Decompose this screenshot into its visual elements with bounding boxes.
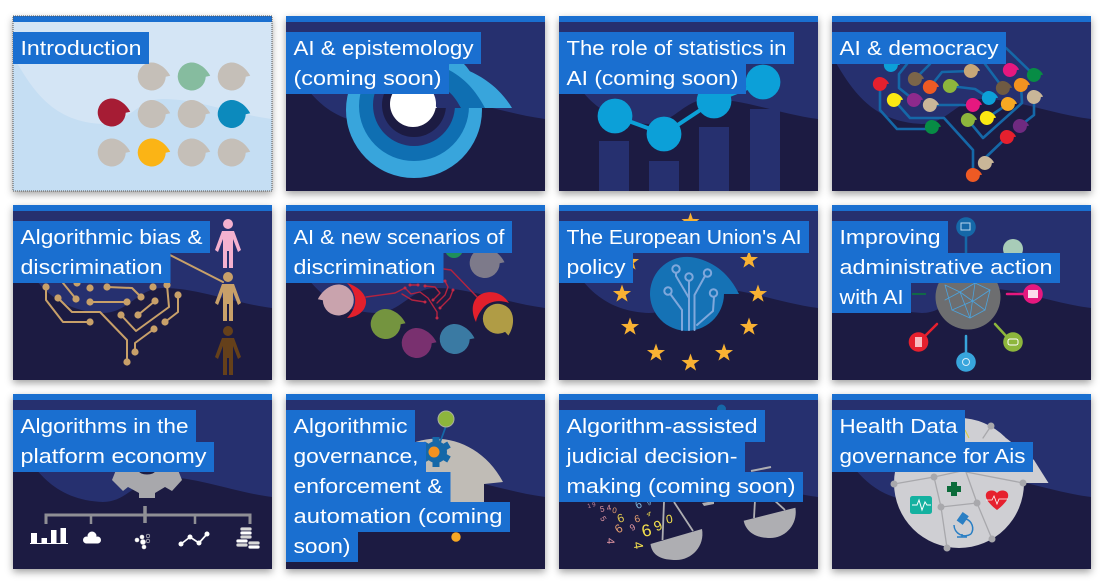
icon: eye rings [346, 40, 512, 178]
heading: Algorithms in the platform economy: Algorithms in the [20, 415, 188, 438]
icon: ring of EU stars [613, 212, 767, 371]
heading: AI & epistemology: AI & epistemology [294, 37, 474, 60]
heading: AI & democracy: AI & democracy [840, 37, 999, 60]
icon: microscope [954, 513, 973, 537]
icon: coloured speech bubbles [318, 240, 521, 358]
heading: Improving administrative action with AI [832, 221, 1060, 313]
heading: AI & new scenarios of discrimination: AI & new scenarios of [294, 226, 505, 249]
heading: Algorithmic governance, enforcement & automation (coming soon): Algorithmic [294, 415, 408, 438]
icon: tan circuit brain [42, 255, 223, 366]
icon: line graph [178, 532, 210, 546]
icon: scattered digits: 6 [633, 513, 642, 526]
panel: Improving administrative action with AI [832, 205, 1091, 380]
icon: scattered digits: 4 [604, 538, 616, 544]
icon: medical cross [947, 482, 961, 496]
icon: gear with nodes [421, 411, 461, 542]
heading: AI & new scenarios of discrimination [286, 221, 512, 283]
heading: Algorithms in the platform economy [13, 410, 214, 472]
icon: coin stacks [236, 527, 260, 549]
heading: Algorithm-assisted judicial decision-making (coming soon): Algorithm-assisted [566, 415, 758, 438]
icon: scattered digits: 9 [646, 500, 653, 508]
icon: hub with network and spokes [909, 217, 1043, 372]
icon: scattered digits: 6 [640, 520, 654, 541]
heading: Algorithm-assisted judicial decision-making (coming soon): judicial decision- [565, 445, 738, 468]
heading: Algorithm-assisted judicial decision-making (coming soon) [559, 410, 803, 502]
icon: network cluster [135, 534, 150, 549]
icon: head silhouette [400, 439, 503, 506]
icon: scattered digits: 6 [633, 499, 644, 512]
panel: Algorithmic governance, enforcement & automation [286, 394, 545, 569]
heading: Improving administrative action with AI: Improving [840, 226, 940, 249]
icon: scattered digits: 5 4 [599, 503, 612, 514]
heading: The European Union's AI policy: policy [566, 256, 626, 279]
icon: scattered digits: 1 9 [587, 502, 597, 510]
icon: circuit speech bubble [650, 257, 739, 331]
icon: bar chart [30, 528, 68, 544]
icon: scattered digits: 5 [598, 515, 608, 523]
icon: scattered digits: 0 [665, 512, 674, 527]
icon: cloud [83, 532, 101, 544]
panel: AI & new scenarios of discrimination [286, 205, 545, 380]
heading: Improving administrative action with AI: administrative action [840, 256, 1052, 279]
heading: The role of statistics in AI: The role of statistics in [566, 37, 786, 60]
icon: scattered digits: 4 [630, 540, 646, 550]
heading: AI & democracy [832, 32, 1006, 64]
icon: gear [112, 468, 182, 498]
chart: branching tree [46, 506, 250, 524]
heading: The role of statistics in AI: AI (coming soon) [566, 67, 738, 90]
panel: Introduction [13, 16, 272, 191]
icon: three people [215, 219, 241, 375]
heading: Algorithmic bias & discrimination: discrimination [20, 256, 162, 279]
icon: pulse monitor [910, 496, 932, 514]
heading: Algorithm-assisted judicial decision-making (coming soon): making (coming soon) [566, 475, 796, 498]
heading: The role of statistics in AI [559, 32, 794, 94]
icon: scattered digits: 6 [615, 510, 626, 526]
heading: Health Data governance for AIs: Health Data [840, 415, 958, 438]
panel: Algorithm-assisted judicial decision-making [559, 394, 818, 569]
heading: Introduction: Introduction [20, 37, 142, 60]
heading: AI & epistemology: (coming soon) [294, 67, 442, 90]
heading: Algorithmic governance, enforcement & automation (coming soon): enforcement & [294, 475, 443, 498]
icon: scattered digits [587, 499, 674, 550]
heading: AI & new scenarios of discrimination: discrimination [294, 256, 436, 279]
heading: Algorithmic governance, enforcement & automation (coming soon): governance, [294, 445, 418, 468]
icon: scales of justice [650, 404, 796, 560]
heading: Algorithmic bias & discrimination [13, 221, 210, 283]
heading: Algorithmic bias & discrimination: Algorithmic bias & [20, 226, 203, 249]
heading: Health Data governance for AIs [832, 410, 1033, 472]
panel: Algorithms in the platform economy [13, 394, 272, 569]
heading: Algorithmic governance, enforcement & automation (coming soon): soon) [294, 535, 350, 558]
icon: scattered digits: 9 [651, 516, 665, 534]
heading: The European Union's AI policy [559, 221, 809, 283]
panel: The role of statistics in AI [559, 16, 818, 191]
panel: AI & democracy [832, 16, 1091, 191]
icon: scattered digits: 0 [611, 506, 618, 515]
heading: Algorithmic governance, enforcement & automation (coming soon): automation (coming [294, 505, 502, 528]
icon: circuit brain with coloured nodes [873, 48, 1043, 182]
heading: Introduction [13, 32, 149, 64]
heading: Improving administrative action with AI: with AI [838, 286, 904, 309]
panel: Algorithmic bias & discrimination [13, 205, 272, 380]
icon: scattered digits: 9 [628, 522, 637, 533]
panel: AI & epistemology [286, 16, 545, 191]
icon: heart [986, 490, 1008, 510]
icon: grid of speech bubbles [98, 62, 250, 166]
icon: segmented health disc [890, 418, 1048, 552]
panel: Health Data governance for AIs [832, 394, 1091, 569]
chart: bars with line [598, 65, 780, 191]
heading: Algorithms in the platform economy: platform economy [20, 445, 207, 468]
icon: red micro circuit and connectors [347, 269, 509, 322]
heading: AI & epistemology [286, 32, 481, 94]
heading: The European Union's AI policy: The European Union's AI [566, 226, 802, 249]
icon: scattered digits: 4 [645, 511, 652, 519]
heading: Health Data governance for AIs: governance for Ais [840, 445, 1026, 468]
heading: Algorithmic governance, enforcement & automation (coming soon) [286, 410, 510, 562]
panel: The European Union's AI policy [559, 205, 818, 380]
icon: scattered digits: 6 [612, 521, 626, 536]
